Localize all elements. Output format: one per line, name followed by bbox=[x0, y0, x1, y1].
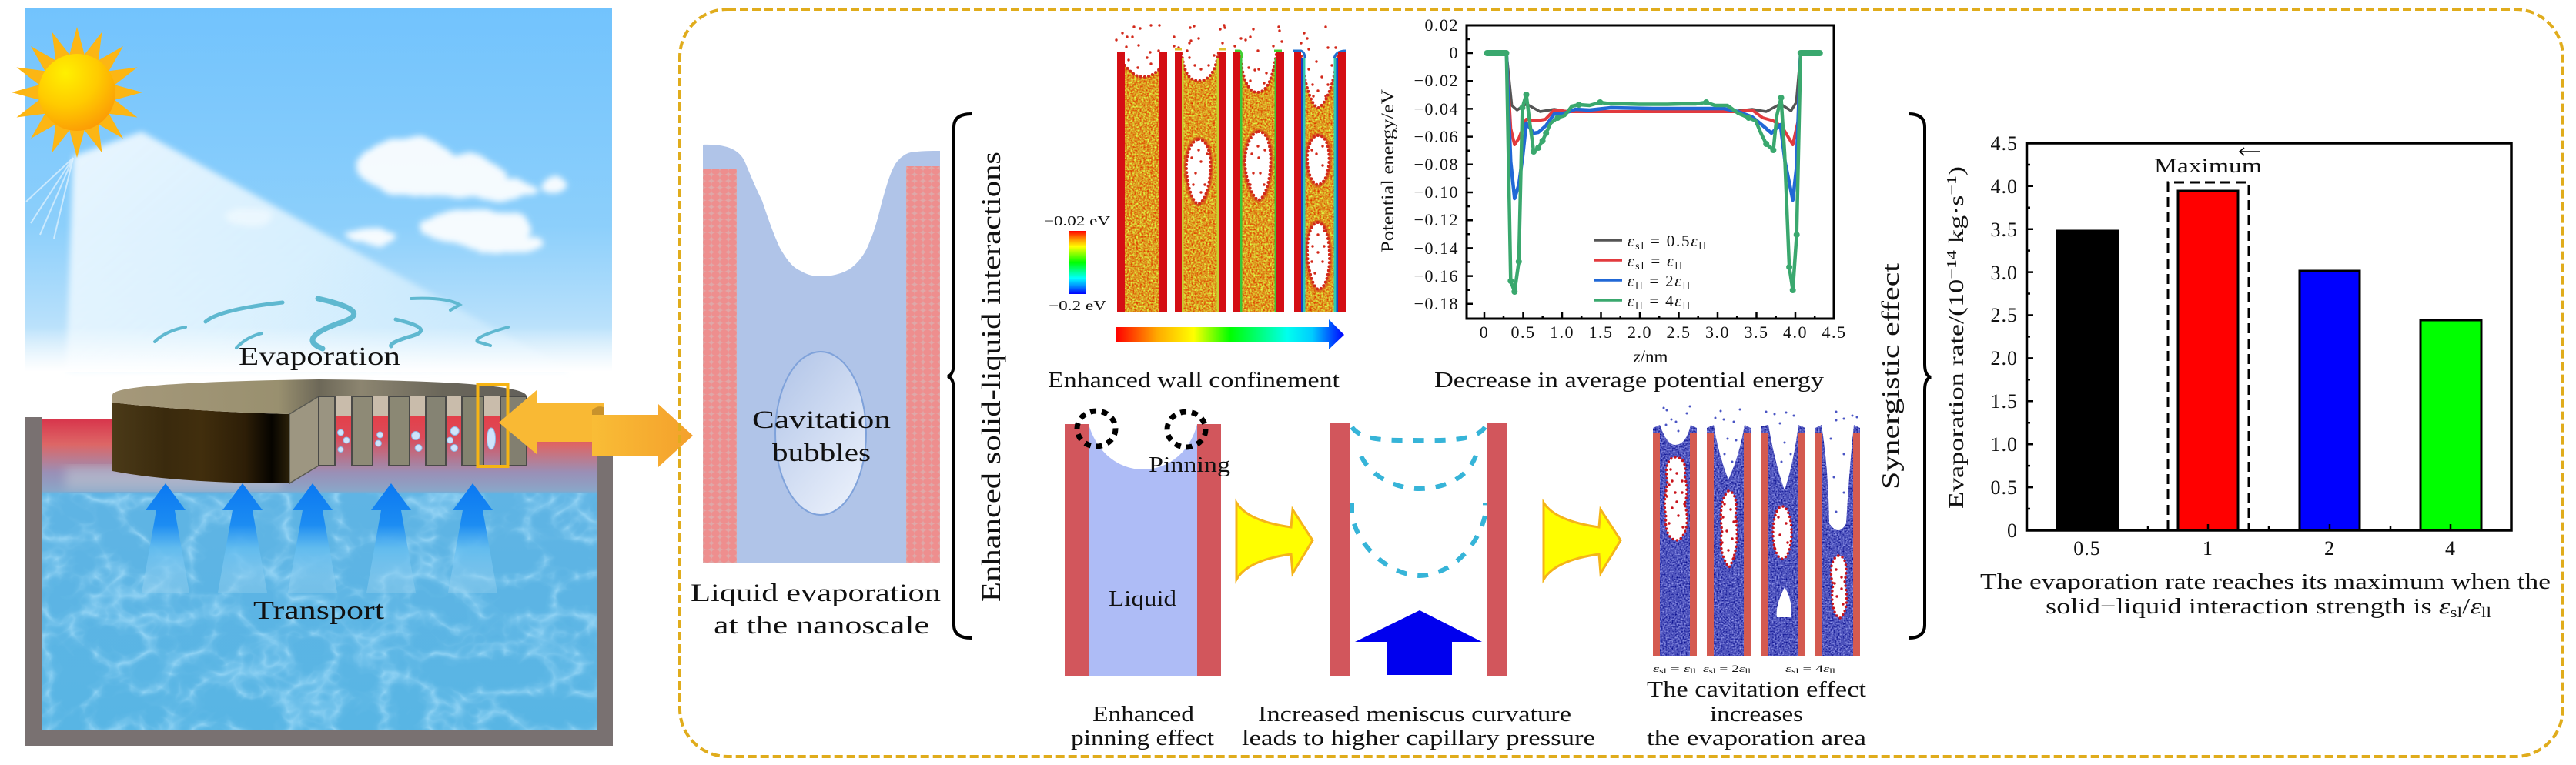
x tick labels: 4.0 bbox=[1783, 322, 1808, 342]
x tick labels: 0 bbox=[1480, 322, 1489, 342]
legend: ll bbox=[1682, 281, 1690, 292]
chart: potential energy line chart bbox=[1378, 15, 1846, 366]
legend: ll bbox=[1674, 261, 1682, 272]
caption: meniscus curvature bbox=[1242, 703, 1595, 750]
state labels: = bbox=[1667, 663, 1684, 674]
clouds bbox=[229, 137, 568, 253]
dashed menisci bbox=[1352, 427, 1485, 576]
axes frame bbox=[2026, 143, 2511, 530]
caption: cavitation effect: the evaporation area bbox=[1647, 727, 1867, 750]
cut face bbox=[289, 396, 319, 483]
pinning circles bbox=[1077, 411, 1206, 447]
y tick labels: −0.18 bbox=[1414, 294, 1459, 313]
state labels: = 2 bbox=[1716, 663, 1739, 674]
y tick labels: 0 bbox=[1449, 43, 1459, 62]
y tick labels bbox=[1991, 132, 2018, 542]
ticks bbox=[1467, 39, 1815, 319]
heading: synergistic effect: Synergistic effect bbox=[1876, 263, 1904, 489]
legend: ε bbox=[1628, 232, 1634, 250]
y axis title: Evaporation rate/(10 bbox=[1945, 337, 1968, 509]
caption: decrease in potential energy: Decrease in average potential energy bbox=[1434, 369, 1824, 393]
x tick labels: 2.5 bbox=[1666, 322, 1691, 342]
curve: blue bbox=[1507, 53, 1801, 200]
caption: evaporation rate conclusion: The evaporation rate reaches its maximum when the bbox=[1980, 570, 2551, 594]
caption: enhanced pinning effect bbox=[1071, 703, 1214, 750]
legend: = bbox=[1645, 252, 1665, 270]
y tick labels: −0.04 bbox=[1414, 99, 1459, 119]
x tick labels: 2.0 bbox=[1628, 322, 1652, 342]
y tick labels: 3.0 bbox=[1991, 262, 2018, 284]
legend: = 4 bbox=[1644, 292, 1674, 310]
caption: enhanced wall confinement: Enhanced wall confinement bbox=[1048, 369, 1340, 393]
y tick labels: −0.12 bbox=[1414, 210, 1459, 229]
caption: evaporation rate conclusion: sl bbox=[2450, 605, 2462, 621]
y tick labels: 2.5 bbox=[1991, 304, 2018, 326]
panel: MD snapshots, orange bbox=[1116, 25, 1346, 312]
channels with liquid bbox=[335, 396, 500, 466]
heading: Transport: Transport bbox=[253, 596, 385, 625]
vapor molecules bbox=[1664, 406, 1857, 512]
bar: 1 bbox=[2178, 191, 2238, 530]
legend: ε bbox=[1674, 292, 1681, 310]
label: pinning: Pinning bbox=[1149, 453, 1230, 477]
x tick labels: 1 bbox=[2203, 537, 2213, 560]
arrow: maximum bbox=[2240, 148, 2260, 155]
red molecules along void edges bbox=[1125, 52, 1338, 289]
bar: 4 bbox=[2420, 320, 2481, 530]
y axis title: −1 bbox=[1944, 175, 1959, 195]
legend: ll bbox=[1635, 281, 1643, 292]
legend: sl bbox=[1635, 241, 1644, 252]
state labels: ll bbox=[1690, 667, 1697, 675]
arrow: yellow bbox=[1236, 503, 1313, 580]
x tick labels: 0.5 bbox=[2073, 537, 2101, 560]
state labels: ε bbox=[1684, 663, 1691, 674]
icon: double arrow bbox=[499, 390, 693, 467]
caption: evaporation rate conclusion: / bbox=[2462, 594, 2471, 619]
legend: = 0.5 bbox=[1645, 232, 1690, 250]
y tick labels: −0.08 bbox=[1414, 155, 1459, 174]
panel: dashed frame bbox=[680, 9, 2563, 757]
sun glints bbox=[26, 158, 73, 239]
y axis title: ) bbox=[1945, 166, 1968, 175]
icon: sun bbox=[12, 27, 142, 158]
right wall bbox=[906, 166, 940, 563]
cavitation bubble bbox=[775, 352, 866, 515]
legend: sl bbox=[1635, 261, 1644, 272]
arrow: capillary pressure bbox=[1355, 610, 1482, 675]
chart: evaporation rate bars bbox=[1944, 132, 2511, 560]
cavitation voids bbox=[1186, 132, 1330, 289]
caption: cavitation effect: The cavitation effect bbox=[1647, 678, 1866, 702]
state labels: = 4 bbox=[1798, 663, 1824, 674]
legend: ε bbox=[1628, 292, 1634, 310]
red molecules interior bbox=[1667, 469, 1843, 604]
caption: evaporation rate conclusion bbox=[1980, 570, 2551, 621]
state labels: ll bbox=[1829, 667, 1836, 675]
y tick labels: −0.10 bbox=[1414, 182, 1459, 202]
brace: solid-liquid bbox=[948, 114, 972, 638]
brace: synergistic bbox=[1909, 114, 1931, 638]
y tick labels: 0 bbox=[2007, 519, 2018, 542]
caption: meniscus curvature: Increased meniscus curvature bbox=[1258, 703, 1571, 727]
legend: ε bbox=[1674, 272, 1681, 290]
solid walls bbox=[1117, 52, 1346, 312]
caption: evaporation rate conclusion: ε bbox=[2470, 594, 2481, 619]
x tick labels: 0.5 bbox=[1510, 322, 1535, 342]
legend bbox=[1594, 232, 1706, 312]
y tick labels: 1.0 bbox=[1991, 433, 2018, 456]
state labels: ll bbox=[1745, 667, 1751, 675]
water body bbox=[42, 419, 597, 730]
label: liquid: Liquid bbox=[1109, 587, 1176, 611]
state labels: sl bbox=[1709, 667, 1716, 675]
legend: = 2 bbox=[1644, 272, 1674, 290]
state labels: ε bbox=[1653, 663, 1661, 674]
caption: enhanced pinning effect: pinning effect bbox=[1071, 727, 1214, 750]
label: maximum: Maximum bbox=[2154, 155, 2262, 177]
curve: red bbox=[1507, 53, 1801, 145]
caption: liquid evaporation: at the nanoscale bbox=[714, 612, 929, 640]
right wall bbox=[1197, 424, 1221, 676]
liquid bbox=[1089, 424, 1197, 676]
legend: ε bbox=[1691, 232, 1698, 250]
maximum dashed box bbox=[2168, 182, 2249, 530]
left wall bbox=[703, 169, 737, 563]
legend: ll bbox=[1635, 301, 1643, 312]
caption: enhanced pinning effect: Enhanced bbox=[1092, 703, 1194, 727]
fuzzy rim around voids bbox=[1186, 132, 1330, 289]
y axis title: kg·s bbox=[1945, 195, 1968, 250]
y tick labels: −0.06 bbox=[1414, 127, 1459, 146]
caption: liquid evaporation: Liquid evaporation bbox=[691, 580, 941, 607]
legend: ε bbox=[1628, 272, 1634, 290]
walls bbox=[1065, 424, 1089, 676]
y tick labels: 3.5 bbox=[1991, 219, 2018, 241]
y tick labels: 0.5 bbox=[1991, 476, 2018, 499]
x tick labels: 2 bbox=[2324, 537, 2335, 560]
state labels: ε bbox=[1703, 663, 1710, 674]
x tick labels: 3.5 bbox=[1745, 322, 1769, 342]
panel: solar evaporation scene bbox=[12, 8, 693, 746]
x axis title: z/nm bbox=[1633, 347, 1668, 366]
state labels: ε bbox=[1739, 663, 1746, 674]
panel: MD snapshots, blue bbox=[1653, 406, 1860, 675]
y tick labels: 1.5 bbox=[1991, 390, 2018, 413]
highlight box bbox=[477, 385, 508, 466]
y tick labels: −0.02 bbox=[1414, 71, 1459, 90]
legend: ll bbox=[1698, 241, 1706, 252]
caption: cavitation effect bbox=[1647, 678, 1867, 750]
liquid noise bbox=[1653, 425, 1860, 656]
liquid in pore bbox=[703, 145, 940, 563]
container walls bbox=[25, 417, 613, 746]
scattered vapor molecules bbox=[1116, 25, 1336, 273]
y tick labels: 0.02 bbox=[1424, 15, 1459, 35]
colorbar: −0.02 eV bbox=[1044, 213, 1110, 229]
ticks bbox=[2026, 165, 2451, 530]
legend: ε bbox=[1667, 252, 1674, 270]
heading: Evaporation: Evaporation bbox=[239, 342, 400, 371]
disc side bbox=[112, 403, 289, 483]
curve: green bbox=[1487, 53, 1820, 292]
panel: nanopore schematic bbox=[691, 145, 941, 640]
state labels bbox=[1653, 663, 1836, 675]
caption: cavitation effect: increases bbox=[1710, 703, 1803, 727]
wall-adjacent potential lines bbox=[1175, 49, 1346, 312]
label: cavitation bubbles: Cavitation bbox=[752, 406, 891, 434]
x tick labels bbox=[2073, 537, 2456, 560]
y axis title: Potential energy/eV bbox=[1378, 89, 1397, 252]
arrow: rainbow direction bbox=[1116, 319, 1344, 349]
state labels: ε bbox=[1785, 663, 1792, 674]
sky background bbox=[25, 8, 612, 371]
porous evaporator disc bbox=[112, 379, 527, 483]
x tick labels: 4 bbox=[2445, 537, 2456, 560]
x tick labels: 4.5 bbox=[1822, 322, 1846, 342]
axes frame bbox=[1467, 25, 1834, 319]
fade of sky to white bbox=[25, 327, 612, 372]
liquid with noise bbox=[1125, 52, 1338, 312]
disc top face bbox=[112, 379, 527, 414]
panel: pinning diagram bbox=[1065, 411, 1230, 676]
comb walls bbox=[319, 396, 527, 466]
x tick labels: 1.5 bbox=[1589, 322, 1614, 342]
colorbar: −0.2 eV bbox=[1049, 298, 1106, 313]
bubbles in channels bbox=[337, 426, 496, 453]
bar: 2 bbox=[2300, 271, 2360, 530]
bar: 0.5 bbox=[2057, 231, 2118, 530]
arrow: yellow 2 bbox=[1544, 503, 1621, 580]
caption: meniscus curvature: leads to higher capillary pressure bbox=[1242, 727, 1595, 750]
state labels: ε bbox=[1823, 663, 1831, 674]
bubble voids bbox=[1664, 457, 1846, 618]
y tick labels: −0.14 bbox=[1414, 239, 1459, 258]
caption: evaporation rate conclusion: solid−liquid interaction strength is ε bbox=[2046, 594, 2447, 619]
x tick labels bbox=[1480, 322, 1846, 342]
label: cavitation bubbles: bubbles bbox=[772, 439, 871, 467]
icon: vapor wisps bbox=[155, 299, 508, 349]
heading: enhanced solid-liquid interactions: Enhanced solid-liquid interactions bbox=[976, 152, 1006, 602]
walls bbox=[1653, 433, 1860, 656]
sunlight beam bbox=[66, 132, 570, 371]
y axis title: −14 bbox=[1944, 250, 1959, 279]
y tick labels: 2.0 bbox=[1991, 347, 2018, 369]
colorbar bbox=[1044, 213, 1110, 313]
caption: evaporation rate conclusion: ll bbox=[2481, 605, 2491, 621]
y tick labels: 4.0 bbox=[1991, 175, 2018, 198]
state labels: sl bbox=[1791, 667, 1799, 675]
legend: ε bbox=[1628, 252, 1634, 270]
state labels: sl bbox=[1659, 667, 1668, 675]
caption: liquid evaporation bbox=[691, 580, 941, 640]
red molecules bbox=[1664, 457, 1846, 618]
legend: ll bbox=[1682, 301, 1690, 312]
curve: gray bbox=[1507, 53, 1801, 112]
x tick labels: 3.0 bbox=[1705, 322, 1730, 342]
walls bbox=[1330, 423, 1507, 676]
icon: transport arrows bbox=[142, 483, 497, 593]
y tick labels: −0.16 bbox=[1414, 266, 1459, 286]
y tick labels: 4.5 bbox=[1991, 132, 2018, 155]
x tick labels: 1.0 bbox=[1550, 322, 1574, 342]
curve markers: green bbox=[1487, 53, 1820, 292]
panel: meniscus curvature bbox=[1330, 423, 1507, 676]
label: cavitation bubbles bbox=[752, 406, 891, 467]
y tick labels bbox=[1414, 15, 1459, 313]
